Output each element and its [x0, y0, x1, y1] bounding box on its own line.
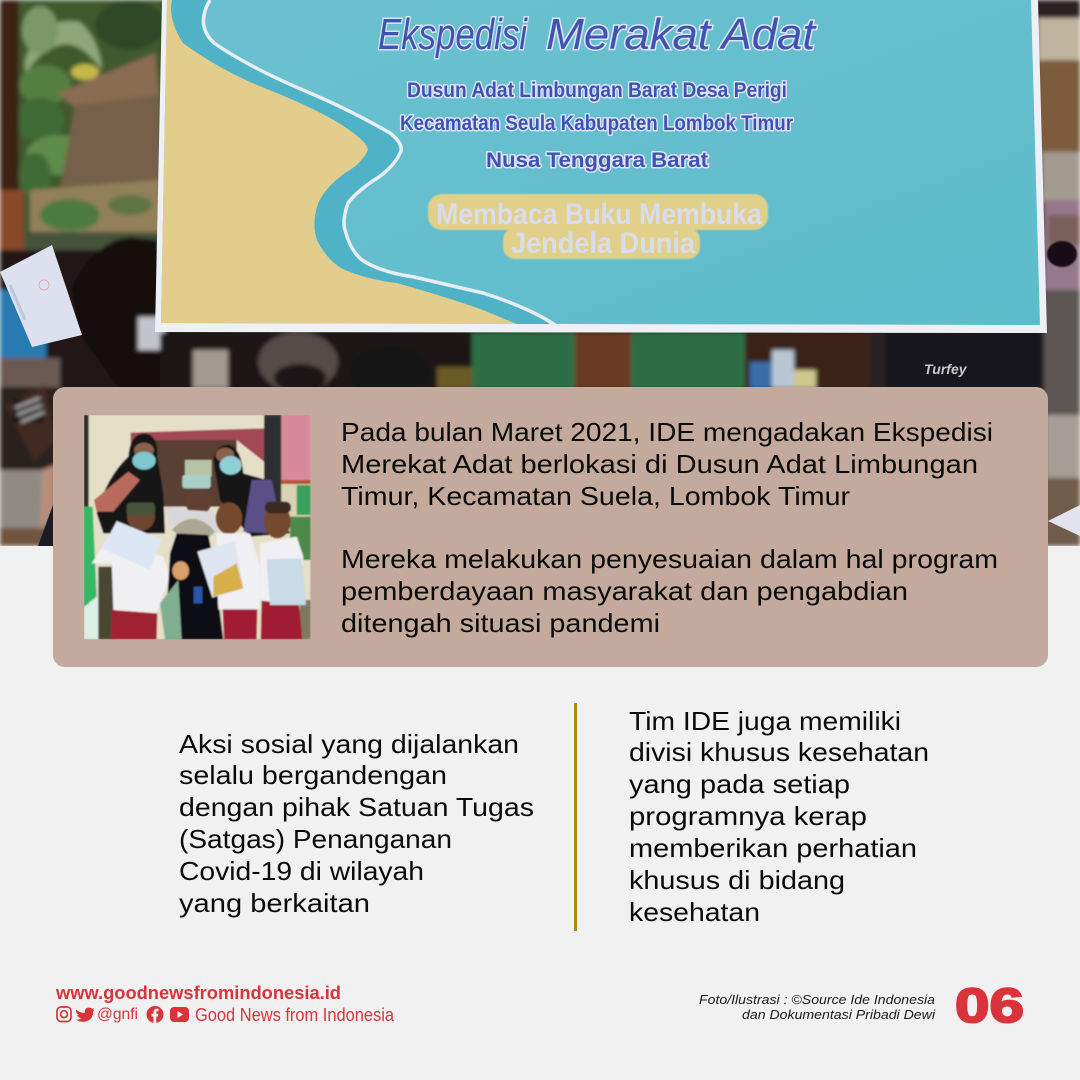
left column text: yang berkaitan [179, 888, 370, 918]
icon: twitter [76, 1008, 94, 1022]
icon: facebook [146, 1006, 164, 1023]
banner [155, 0, 1047, 333]
left column text: (Satgas) Penanganan [179, 824, 452, 854]
footer: website and social handles [55, 983, 395, 1025]
icon: instagram [57, 1007, 71, 1022]
banner location lines [400, 79, 793, 172]
right column text: Tim IDE juga memiliki [629, 706, 901, 736]
intro paragraph one: Merekat Adat berlokasi di Dusun Adat Limbungan [341, 449, 978, 479]
left column text [179, 729, 534, 918]
photo credit [699, 992, 936, 1022]
children's drawing held up at left [0, 245, 82, 347]
right column text [629, 706, 929, 927]
banner title [378, 16, 818, 60]
intro paragraph one [341, 417, 993, 511]
shirt logo: Turfey [924, 361, 968, 377]
banner location lines: Kecamatan Seula Kabupaten Lombok Timur [400, 112, 793, 135]
banner slogan: Jendela Dunia [511, 227, 695, 260]
social handle: @gnfi [97, 1006, 138, 1023]
banner yellow pills [428, 194, 768, 259]
banner teal field [161, 0, 1040, 325]
banner slogan: Membaca Buku Membuka [436, 198, 762, 231]
banner sand shape [161, 0, 517, 324]
child left [126, 513, 156, 531]
intro paragraph two: Mereka melakukan penyesuaian dalam hal program [341, 544, 998, 574]
banner title: Ekspedisi [378, 10, 528, 59]
right column text: yang pada setiap [629, 769, 850, 799]
right column text: khusus di bidang [629, 865, 845, 895]
intro paragraph one: Timur, Kecamatan Suela, Lombok Timur [341, 481, 850, 511]
right column text: kesehatan [629, 897, 760, 927]
adult left [97, 433, 165, 533]
banner location lines: Nusa Tenggara Barat [486, 149, 708, 172]
panel: intro card [53, 387, 1048, 667]
page number: 06 [955, 980, 1024, 1033]
column divider [574, 703, 577, 931]
adult right [213, 445, 290, 537]
intro paragraph two: pemberdayaan masyarakat dan pengabdian [341, 576, 908, 606]
left column text: dengan pihak Satuan Tugas [179, 792, 534, 822]
banner title: Merakat Adat [546, 10, 817, 59]
photo credit: Foto/Ilustrasi : ©Source Ide Indonesia [699, 992, 935, 1007]
brand name: Good News from Indonesia [195, 1005, 395, 1025]
photo credit: dan Dokumentasi Pribadi Dewi [742, 1007, 936, 1022]
left column text: selalu bergandengan [179, 760, 447, 790]
photo scenery: foliage, huts and seated crowd [0, 0, 1080, 546]
icon: youtube [170, 1007, 189, 1022]
center masked figure [172, 519, 215, 537]
child middle [216, 502, 242, 534]
banner white wave line [203, 0, 555, 325]
right column text: programnya kerap [629, 801, 867, 831]
banner slogan [438, 202, 762, 254]
intro paragraph two: ditengah situasi pandemi [341, 608, 660, 638]
banner darker teal wave [171, 0, 555, 324]
intro paragraph two [341, 544, 998, 638]
child right [264, 511, 292, 540]
website url: www.goodnewsfromindonesia.id [55, 983, 341, 1003]
child center back [186, 505, 212, 512]
right column text: memberikan perhatian [629, 833, 917, 863]
inset photo: children holding drawings [84, 415, 311, 639]
right column text: divisi khusus kesehatan [629, 737, 929, 767]
banner white border [155, 0, 1047, 333]
left column text: Aksi sosial yang dijalankan [179, 729, 519, 759]
intro paragraph one: Pada bulan Maret 2021, IDE mengadakan Ekspedisi [341, 417, 993, 447]
left column text: Covid-19 di wilayah [179, 856, 424, 886]
banner location lines: Dusun Adat Limbungan Barat Desa Perigi [407, 79, 787, 102]
hero photo: banner at community event [0, 0, 1080, 546]
